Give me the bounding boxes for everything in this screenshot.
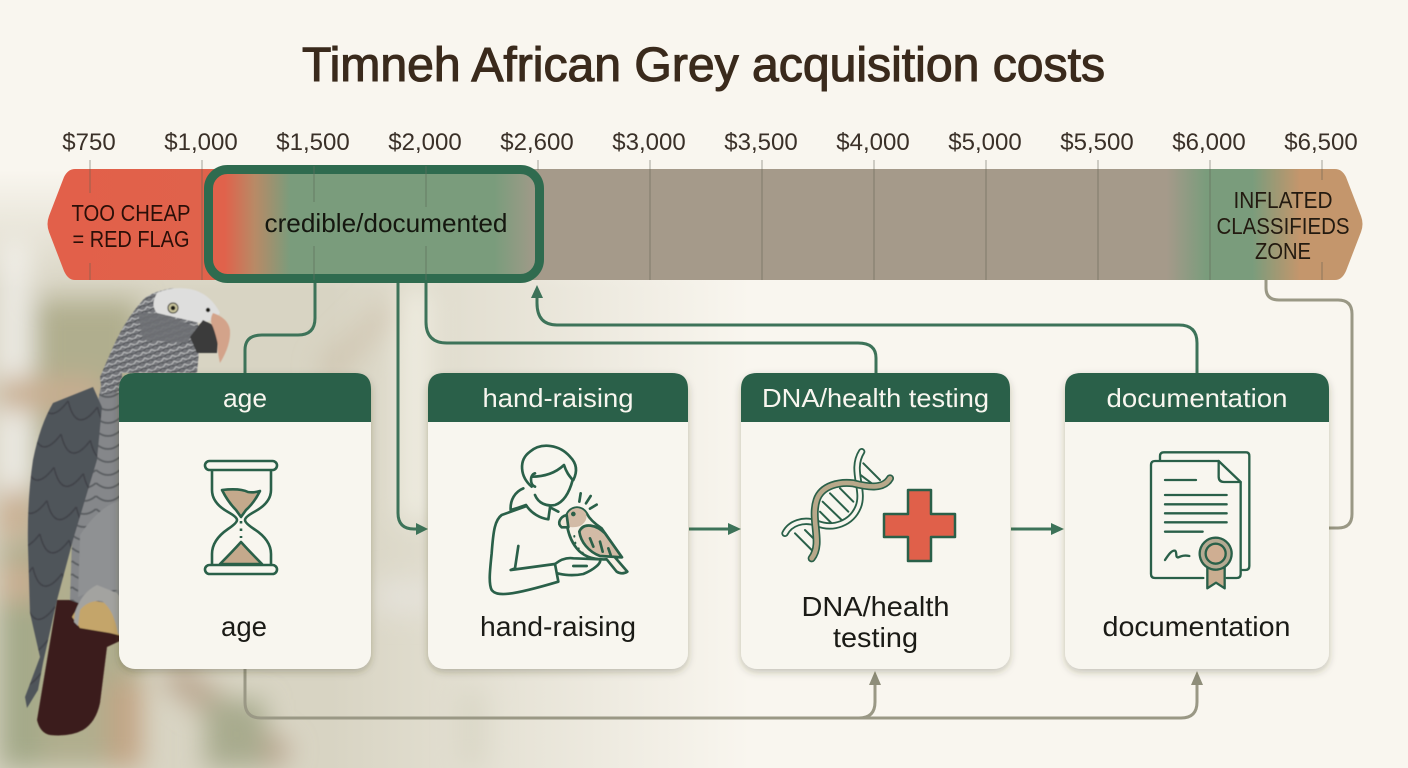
price axis labels: $2,000: [388, 129, 462, 156]
price axis labels: $5,500: [1060, 129, 1134, 156]
price range bar: [48, 169, 1362, 280]
heading: age: age: [223, 383, 267, 413]
heading: DNA/health testing: DNA/health testing: [762, 383, 989, 413]
label: DNA/health testing: [802, 591, 950, 653]
credible/documented highlight box: [208, 166, 540, 280]
parrot eye: [168, 303, 178, 313]
parrot beak: [211, 313, 230, 363]
green connectors from highlight box: [245, 283, 1197, 529]
price axis labels: $6,500: [1284, 129, 1358, 156]
parrot branch perch: [72, 600, 122, 636]
icon: DNA helix: [785, 452, 890, 558]
price axis labels: $5,000: [948, 129, 1022, 156]
label: too cheap red flag: [72, 200, 190, 252]
bar tick marks: [90, 160, 1322, 280]
price axis labels: $4,000: [836, 129, 910, 156]
price axis labels: $6,000: [1172, 129, 1246, 156]
label: inflated classifieds zone: ZONE: [1255, 238, 1311, 264]
price axis labels: [62, 129, 1358, 156]
price axis labels: $1,000: [164, 129, 238, 156]
parrot tail: [37, 600, 122, 735]
price axis labels: $750: [62, 129, 116, 156]
label: DNA/health testing: testing: [833, 622, 918, 653]
label: age: age: [221, 611, 267, 642]
price axis labels: $1,500: [276, 129, 350, 156]
title: Timneh African Grey acquisition costs: [302, 39, 1105, 92]
parrot cheek: [138, 313, 197, 343]
parrot neck: [100, 288, 200, 395]
icon: hourglass: [205, 461, 277, 574]
label: hand-raising: hand-raising: [480, 611, 636, 642]
connector arrowheads: [416, 285, 1064, 535]
grey connectors from age card: [245, 669, 1203, 718]
panel: age: [119, 373, 371, 669]
label: inflated classifieds zone: CLASSIFIEDS: [1216, 213, 1350, 239]
grey connector from inflated zone: [1266, 280, 1352, 528]
parrot lower beak: [190, 320, 218, 353]
parrot foot: [74, 585, 122, 634]
panel: documentation: [1065, 373, 1329, 669]
parrot belly light patch: [78, 500, 122, 597]
heading: hand-raising: hand-raising: [482, 383, 634, 413]
panel: hand-raising: [428, 373, 688, 669]
price axis labels: $3,000: [612, 129, 686, 156]
label: too cheap red flag: TOO CHEAP: [72, 200, 190, 226]
price axis labels: $2,600: [500, 129, 574, 156]
label: documentation: documentation: [1102, 611, 1290, 642]
heading: documentation: documentation: [1106, 383, 1288, 413]
parrot photo illustration: [25, 288, 230, 735]
price axis labels: $3,500: [724, 129, 798, 156]
label: inflated classifieds zone: INFLATED: [1234, 187, 1332, 213]
parrot head: [154, 288, 220, 323]
parrot wing: [25, 387, 102, 708]
icon: certificate documents: [1151, 452, 1249, 588]
label: credible/documented: credible/documented: [264, 208, 508, 238]
parrot body: [70, 372, 122, 620]
icon: person holding bird: [490, 446, 627, 594]
blurred aviary photo background: [0, 170, 750, 768]
label: too cheap red flag: = RED FLAG: [72, 226, 190, 252]
icon: medical cross: [884, 490, 955, 561]
label: inflated classifieds zone: [1216, 187, 1350, 264]
label: DNA/health testing: DNA/health: [802, 591, 950, 622]
panel: DNA/health testing: [741, 373, 1010, 669]
